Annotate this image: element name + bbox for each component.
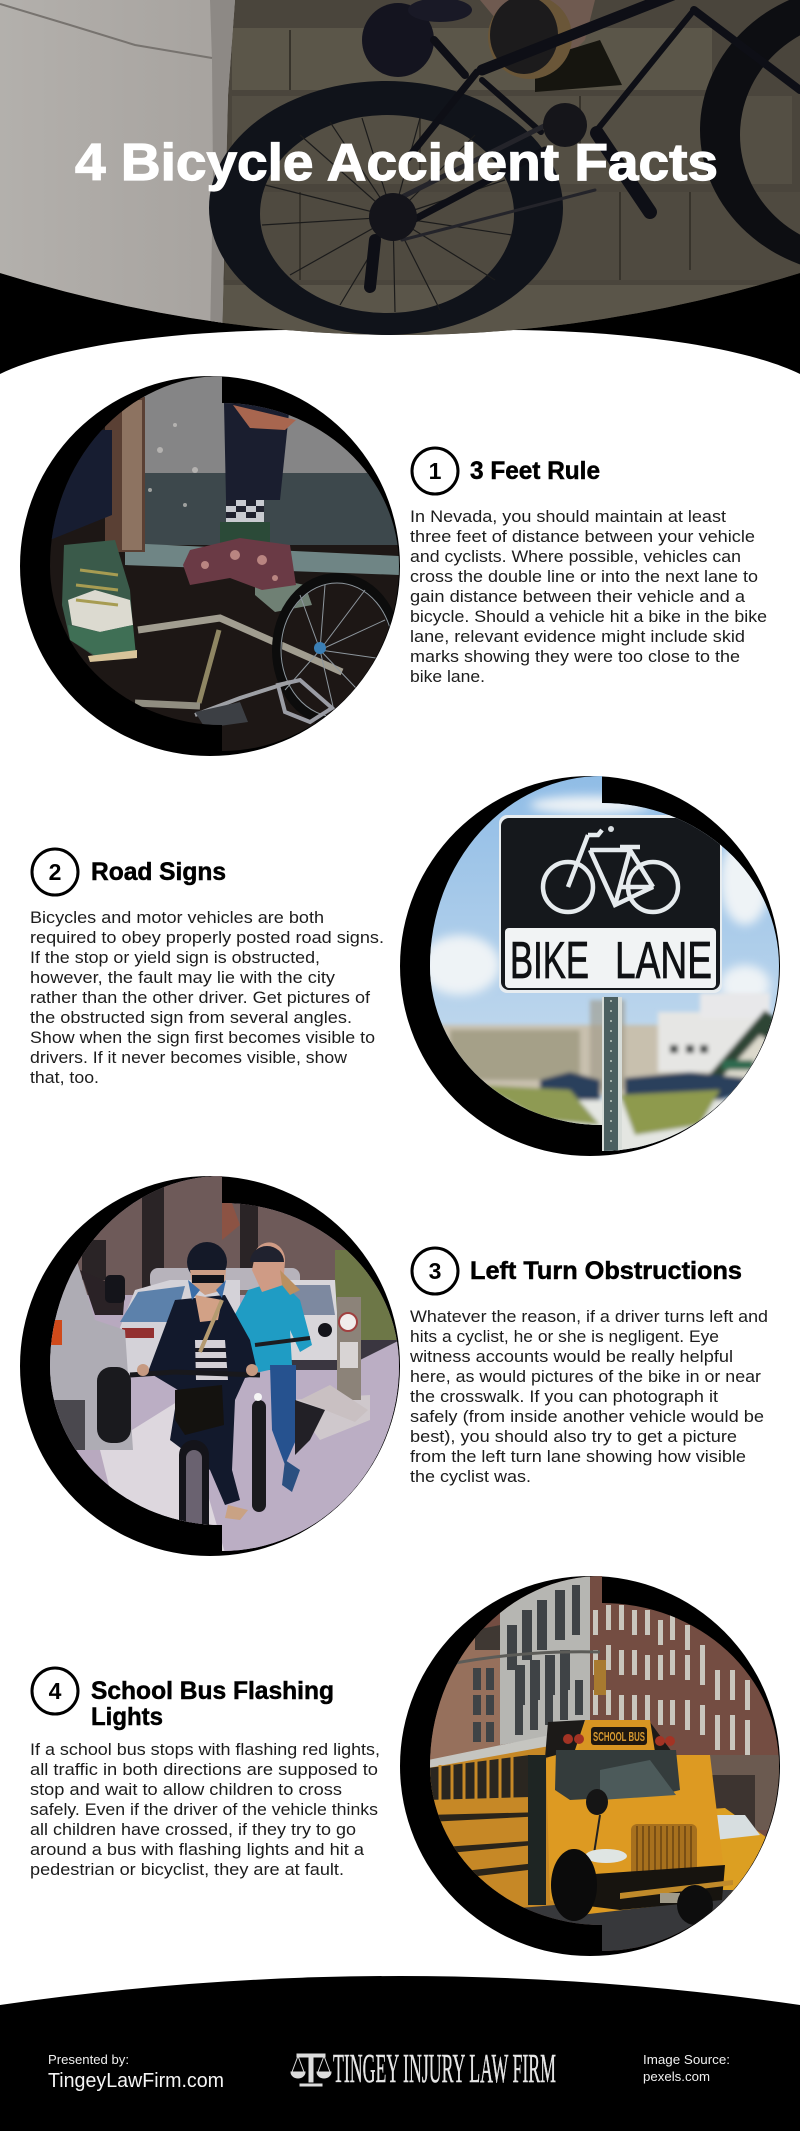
text block: fact 4: pedestrian or bicyclist, they are at fault. <box>30 1860 344 1879</box>
presented by: TingeyLawFirm.com <box>48 2070 224 2092</box>
presented by: Presented by: <box>48 2052 129 2067</box>
number badge 4: 4 <box>49 1678 62 1704</box>
number badge 3: 3 <box>429 1258 441 1284</box>
number badge 1 <box>412 448 458 494</box>
text block: fact 3: witness accounts would be really helpful <box>409 1347 733 1366</box>
text block: fact 2: required to obey properly posted road signs. <box>30 928 384 947</box>
road sign: BIKE <box>510 932 589 990</box>
panel: fact 4 <box>30 1570 800 1970</box>
text block: fact 1: In Nevada, you should maintain at least <box>410 507 726 526</box>
taxi <box>716 1808 766 1896</box>
panel: fact 1 <box>20 370 767 760</box>
text block: fact 1: bike lane. <box>410 667 485 686</box>
text block: fact 1: bicycle. Should a vehicle hit a bike in the bike <box>410 607 767 626</box>
image source: pexels.com <box>643 2069 710 2084</box>
cyclist in navy jacket <box>130 1242 262 1550</box>
curb pillar and parking sign <box>300 1297 368 1422</box>
heading: School Bus Flashing Lights: Lights <box>91 1703 163 1731</box>
photo: bike lane sign <box>400 770 800 1170</box>
text block: fact 1: and cyclists. Where possible, vehicles can <box>410 547 741 566</box>
photo: sneakers on bike <box>20 370 410 760</box>
text block: fact 1: three feet of distance between your vehicle <box>410 527 755 546</box>
heading: Left Turn Obstructions: Left Turn Obstructions <box>470 1257 742 1285</box>
text block: fact 3 <box>409 1307 768 1486</box>
text block: fact 1: marks showing they were too close to the <box>410 647 740 666</box>
text block: fact 2: the obstructed sign from several angles. <box>30 1008 352 1027</box>
panel: fact 2 <box>30 770 800 1170</box>
heading: 3 Feet Rule: 3 Feet Rule <box>470 457 600 485</box>
photo: two cyclists <box>20 1170 410 1570</box>
text block: fact 2: Show when the sign first becomes visible to <box>30 1028 375 1047</box>
image source <box>643 2052 730 2084</box>
header band <box>0 0 800 400</box>
text block: fact 4: around a bus with flashing lights and hit a <box>30 1840 365 1859</box>
presented by <box>48 2052 224 2092</box>
text block: fact 1: cross the double line or into the next lane to <box>410 567 758 586</box>
icon: scales of justice <box>291 2054 331 2086</box>
bicycle frame and rider <box>362 0 800 287</box>
rear bicycle wheel <box>209 81 563 335</box>
text block: fact 4: If a school bus stops with flashing red lights, <box>30 1740 380 1759</box>
text block: fact 4: all traffic in both directions are supposed to <box>30 1760 378 1779</box>
text block: fact 3: the crosswalk. If you can photograph it <box>410 1387 718 1406</box>
text block: fact 2: that, too. <box>30 1068 99 1087</box>
header photo: bicycle on stairs <box>0 0 800 340</box>
heading: School Bus Flashing Lights <box>91 1677 334 1731</box>
number badge 3 <box>412 1248 458 1294</box>
number badge 1: 1 <box>429 458 442 484</box>
text block: fact 1 <box>410 507 767 686</box>
text block: fact 4: safely. Even if the driver of the vehicle thinks <box>30 1800 378 1819</box>
text block: fact 3: safely (from inside another vehicle would be <box>410 1407 764 1426</box>
panel: fact 3 <box>20 1170 768 1570</box>
text block: fact 3: hits a cyclist, he or she is negligent. Eye <box>410 1327 719 1346</box>
heading: Road Signs: Road Signs <box>91 858 226 886</box>
photo: school bus <box>400 1570 800 1970</box>
text block: fact 3: from the left turn lane showing how visible <box>410 1447 746 1466</box>
number badge 2 <box>32 849 78 895</box>
text block: fact 4: all children have crossed, if they try to go <box>30 1820 356 1839</box>
number badge 2: 2 <box>49 859 61 885</box>
road sign <box>499 815 722 993</box>
text block: fact 2: rather than the other driver. Get pictures of <box>30 988 370 1007</box>
sign post <box>602 997 622 1152</box>
text block: fact 3: best), you should also try to get a picture <box>410 1427 737 1446</box>
title: 4 Bicycle Accident Facts <box>75 134 718 192</box>
text block: fact 4 <box>30 1740 380 1879</box>
text block: fact 2: Bicycles and motor vehicles are both <box>30 908 324 927</box>
text block: fact 2: If the stop or yield sign is obstructed, <box>30 948 320 967</box>
text block: fact 3: the cyclist was. <box>410 1467 531 1486</box>
text block: fact 3: here, as would pictures of the bike in or near <box>410 1367 761 1386</box>
school bus body <box>428 1720 733 1925</box>
text block: fact 1: gain distance between their vehicle and a <box>410 587 746 606</box>
road sign: LANE <box>615 932 712 990</box>
parked cars <box>50 1255 340 1450</box>
text block: fact 2: however, the fault may lie with the city <box>30 968 336 987</box>
school bus body: SCHOOL BUS <box>593 1729 645 1744</box>
text block: fact 3: Whatever the reason, if a driver turns left and <box>410 1307 768 1326</box>
logo: Tingey Injury Law Firm <box>291 2045 556 2091</box>
text block: fact 4: stop and wait to allow children to cross <box>30 1780 342 1799</box>
image source: Image Source: <box>643 2052 730 2067</box>
text block: fact 2 <box>30 908 384 1087</box>
heading: School Bus Flashing Lights: School Bus Flashing <box>91 1677 334 1705</box>
number badge 4 <box>32 1668 78 1714</box>
text block: fact 2: drivers. If it never becomes visible, show <box>30 1048 348 1067</box>
text block: fact 1: lane, relevant evidence might include skid <box>410 627 745 646</box>
far bicycle wheel <box>700 0 800 275</box>
cyclist in blue jacket <box>232 1242 332 1512</box>
footer <box>0 1976 800 2131</box>
